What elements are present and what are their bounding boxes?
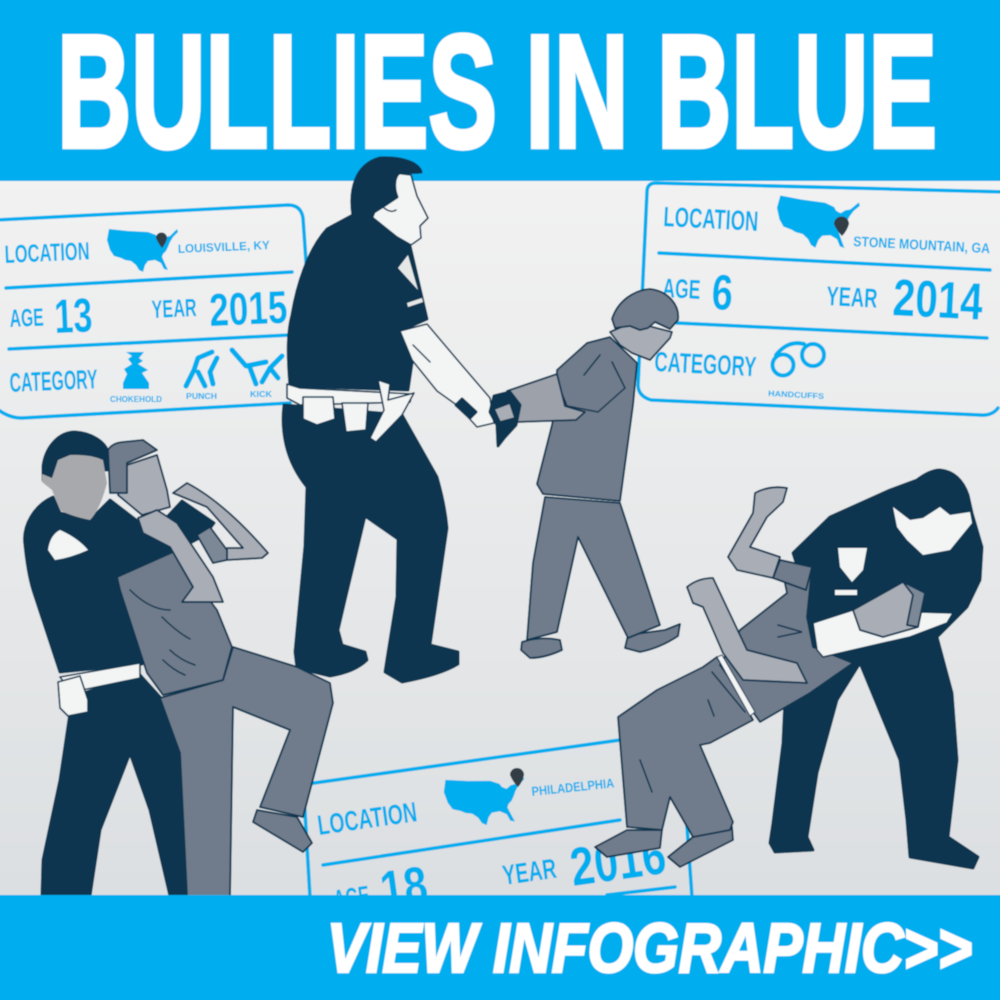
- case card: Stone Mountain: YEAR: [826, 281, 878, 314]
- icon: US map with pin: [107, 229, 178, 272]
- case card: Philadelphia: LOCATION: [316, 796, 419, 841]
- case card: Philadelphia: PHILADELPHIA: [531, 775, 615, 799]
- call to action banner: [0, 895, 1000, 1000]
- victim shirt: [117, 552, 232, 695]
- case card: Philadelphia: 18: [377, 856, 431, 920]
- officer head: [352, 158, 428, 245]
- figure: right officer: [770, 470, 982, 868]
- icon: kick: [232, 350, 282, 384]
- child trousers: [527, 497, 660, 640]
- figure: center officer: [283, 158, 494, 682]
- victim raised arm: [728, 487, 787, 578]
- case card: Louisville: AGE: [9, 304, 44, 333]
- victim near arm: [138, 510, 223, 602]
- case card: Louisville: CATEGORY: [9, 364, 98, 398]
- victim forearm held by officer: [853, 582, 925, 637]
- case card: Philadelphia: AGE: [332, 880, 371, 915]
- case card: Louisville: KICK: [250, 390, 272, 399]
- icon: chokehold: [123, 352, 149, 389]
- officer arm: [400, 324, 494, 427]
- icon: handcuffs: [772, 343, 824, 376]
- figure: left officer: [25, 432, 214, 896]
- victim shirt: [720, 560, 853, 722]
- figure: left victim: [108, 440, 333, 896]
- figure: handcuffed child: [456, 289, 680, 658]
- belt and pouch: [58, 663, 140, 716]
- case card: Louisville: CHOKEHOLD: [110, 395, 162, 404]
- title banner: [0, 0, 1000, 182]
- officer trousers: [283, 405, 458, 682]
- case card: Louisville: [0, 205, 308, 418]
- victim sleeve: [773, 560, 812, 590]
- case card: Philadelphia: [304, 733, 692, 920]
- victim trousers: [160, 647, 333, 896]
- icon: US map with pin: [774, 195, 860, 251]
- victim far arm: [173, 483, 268, 560]
- child shirt: [537, 337, 637, 501]
- victim shoe: [253, 810, 312, 852]
- officer torso and arm: [25, 497, 214, 672]
- case card: Louisville: PUNCH: [186, 392, 217, 401]
- case card: Louisville: LOCATION: [4, 237, 90, 269]
- case card: Stone Mountain: AGE: [662, 273, 701, 305]
- case card: Stone Mountain: 6: [710, 264, 734, 321]
- victim head: [108, 440, 170, 515]
- case card: Louisville: YEAR: [151, 294, 197, 324]
- victim lower arm: [687, 578, 807, 683]
- case card: Philadelphia: YEAR: [501, 853, 558, 891]
- child neck and head: [610, 289, 678, 360]
- chest badge: [838, 548, 867, 582]
- case card: Stone Mountain: [638, 183, 1000, 415]
- background panel: [0, 181, 1000, 901]
- victim trousers: [618, 657, 753, 837]
- icon: US map with pin: [443, 768, 527, 827]
- duty belt with holster: [287, 380, 414, 442]
- sleeve badge: [48, 530, 88, 560]
- child arms: [507, 374, 585, 422]
- officer arm: [813, 610, 953, 657]
- child shoes: [521, 624, 680, 658]
- officer body and legs: [770, 470, 982, 868]
- victim shoes: [595, 827, 733, 867]
- case card: Louisville: LOUISVILLE, KY: [178, 238, 270, 256]
- case card: Philadelphia: 2016: [566, 825, 670, 898]
- case card: Stone Mountain: LOCATION: [663, 201, 759, 237]
- handcuffs: [490, 392, 520, 446]
- icon: punch: [186, 352, 217, 386]
- officer legs: [42, 675, 195, 896]
- officer shirt: [288, 215, 427, 390]
- case card: Stone Mountain: CATEGORY: [654, 346, 757, 382]
- case card: Louisville: 2015: [208, 281, 288, 336]
- case card: Stone Mountain: HANDCUFFS: [768, 389, 825, 401]
- officer shoulder badge: [398, 255, 418, 290]
- case card: Louisville: 13: [53, 289, 93, 344]
- officer head: [42, 432, 108, 520]
- figure: right victim: [595, 487, 953, 867]
- officer face: [893, 507, 972, 555]
